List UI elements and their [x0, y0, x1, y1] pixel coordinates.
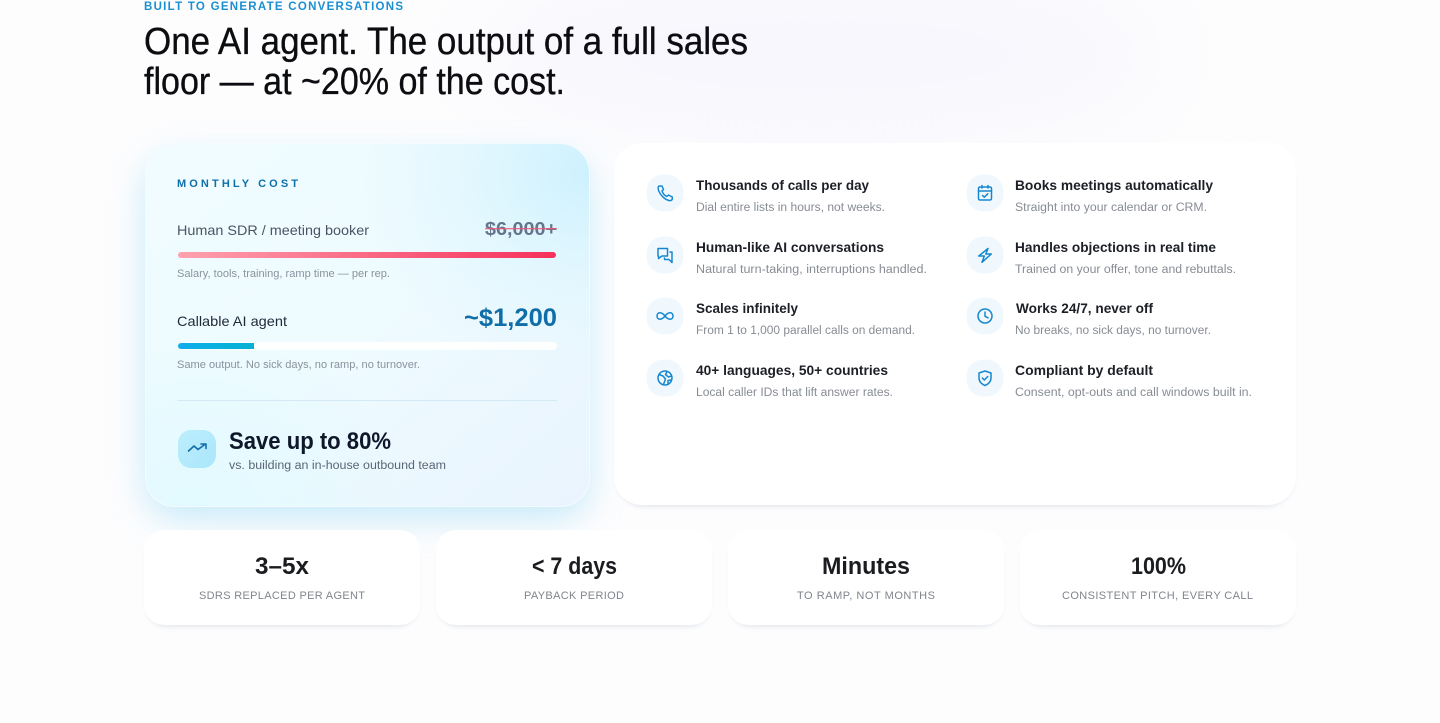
icon: chat bubbles	[658, 248, 672, 262]
feature: conversations: Human-like AI conversations	[696, 240, 884, 255]
section eyebrow: BUILT TO GENERATE CONVERSATIONS	[144, 1, 403, 13]
stat: ramp	[728, 530, 1004, 627]
feature: always on	[966, 298, 1211, 337]
callable AI agent row: Same output. No sick days, no ramp, no turnover.	[177, 359, 420, 371]
headline	[144, 21, 748, 103]
feature: thousands of calls: Thousands of calls per day	[696, 178, 869, 193]
feature: scales infinitely: From 1 to 1,000 parallel calls on demand.	[696, 325, 915, 337]
icon: calendar check	[978, 186, 992, 200]
human SDR row: Human SDR / meeting booker	[177, 222, 369, 238]
stat: ramp: Minutes	[822, 553, 910, 580]
feature: objections	[966, 236, 1236, 276]
feature: books meetings: Books meetings automatically	[1015, 178, 1213, 193]
callable AI agent row: ~$1,200	[464, 304, 557, 332]
icon: clock	[978, 309, 992, 323]
stat: ramp: TO RAMP, NOT MONTHS	[797, 590, 935, 602]
feature: languages	[646, 360, 893, 399]
human SDR row: $6,000+	[485, 219, 557, 239]
feature: compliant	[966, 360, 1252, 399]
stat: payback	[436, 530, 712, 627]
stat: consistent pitch	[1020, 530, 1296, 627]
feature: thousands of calls	[646, 174, 885, 214]
human SDR row: Salary, tools, training, ramp time — per rep.	[177, 268, 390, 280]
feature: thousands of calls: Dial entire lists in hours, not weeks.	[696, 202, 885, 214]
icon: globe	[658, 371, 672, 385]
feature: objections: Handles objections in real time	[1015, 240, 1216, 255]
stat: SDRs replaced: 3–5x	[255, 553, 310, 580]
feature: conversations: Natural turn-taking, interruptions handled.	[696, 264, 927, 276]
icon: lightning bolt	[979, 248, 991, 262]
icon: infinity	[657, 313, 673, 319]
stat: payback: PAYBACK PERIOD	[524, 590, 624, 602]
label: monthly cost: MONTHLY COST	[177, 178, 298, 190]
feature: books meetings	[966, 174, 1213, 214]
feature: conversations	[646, 236, 927, 276]
savings callout	[178, 428, 446, 472]
stat: SDRs replaced	[144, 530, 420, 627]
callable AI agent row	[177, 304, 557, 371]
feature: compliant: Compliant by default	[1015, 363, 1154, 378]
human SDR row	[177, 219, 557, 280]
headline: floor — at ~20% of the cost.	[144, 61, 565, 103]
feature: scales infinitely	[646, 298, 915, 337]
feature: languages: 40+ languages, 50+ countries	[696, 363, 888, 378]
feature: languages: Local caller IDs that lift answer rates.	[696, 387, 893, 399]
headline: One AI agent. The output of a full sales	[144, 21, 748, 63]
feature: compliant: Consent, opt-outs and call windows built in.	[1015, 387, 1252, 399]
stat: consistent pitch: CONSISTENT PITCH, EVERY CALL	[1062, 590, 1253, 602]
icon: trending up	[178, 430, 216, 468]
stat: SDRs replaced: SDRS REPLACED PER AGENT	[199, 590, 365, 602]
feature: objections: Trained on your offer, tone and rebuttals.	[1015, 264, 1236, 276]
panel: capabilities	[614, 143, 1296, 507]
stat: payback: < 7 days	[532, 553, 617, 580]
savings callout: vs. building an in-house outbound team	[229, 460, 446, 472]
feature: books meetings: Straight into your calendar or CRM.	[1015, 202, 1207, 214]
feature: always on: Works 24/7, never off	[1016, 301, 1154, 316]
panel: monthly cost	[146, 144, 590, 518]
icon: shield check	[979, 371, 991, 386]
icon: phone	[658, 186, 672, 201]
callable AI agent row: Callable AI agent	[177, 313, 287, 329]
feature: always on: No breaks, no sick days, no turnover.	[1015, 325, 1211, 337]
savings callout: Save up to 80%	[229, 428, 391, 455]
stat: consistent pitch: 100%	[1131, 553, 1186, 580]
feature: scales infinitely: Scales infinitely	[696, 301, 798, 316]
